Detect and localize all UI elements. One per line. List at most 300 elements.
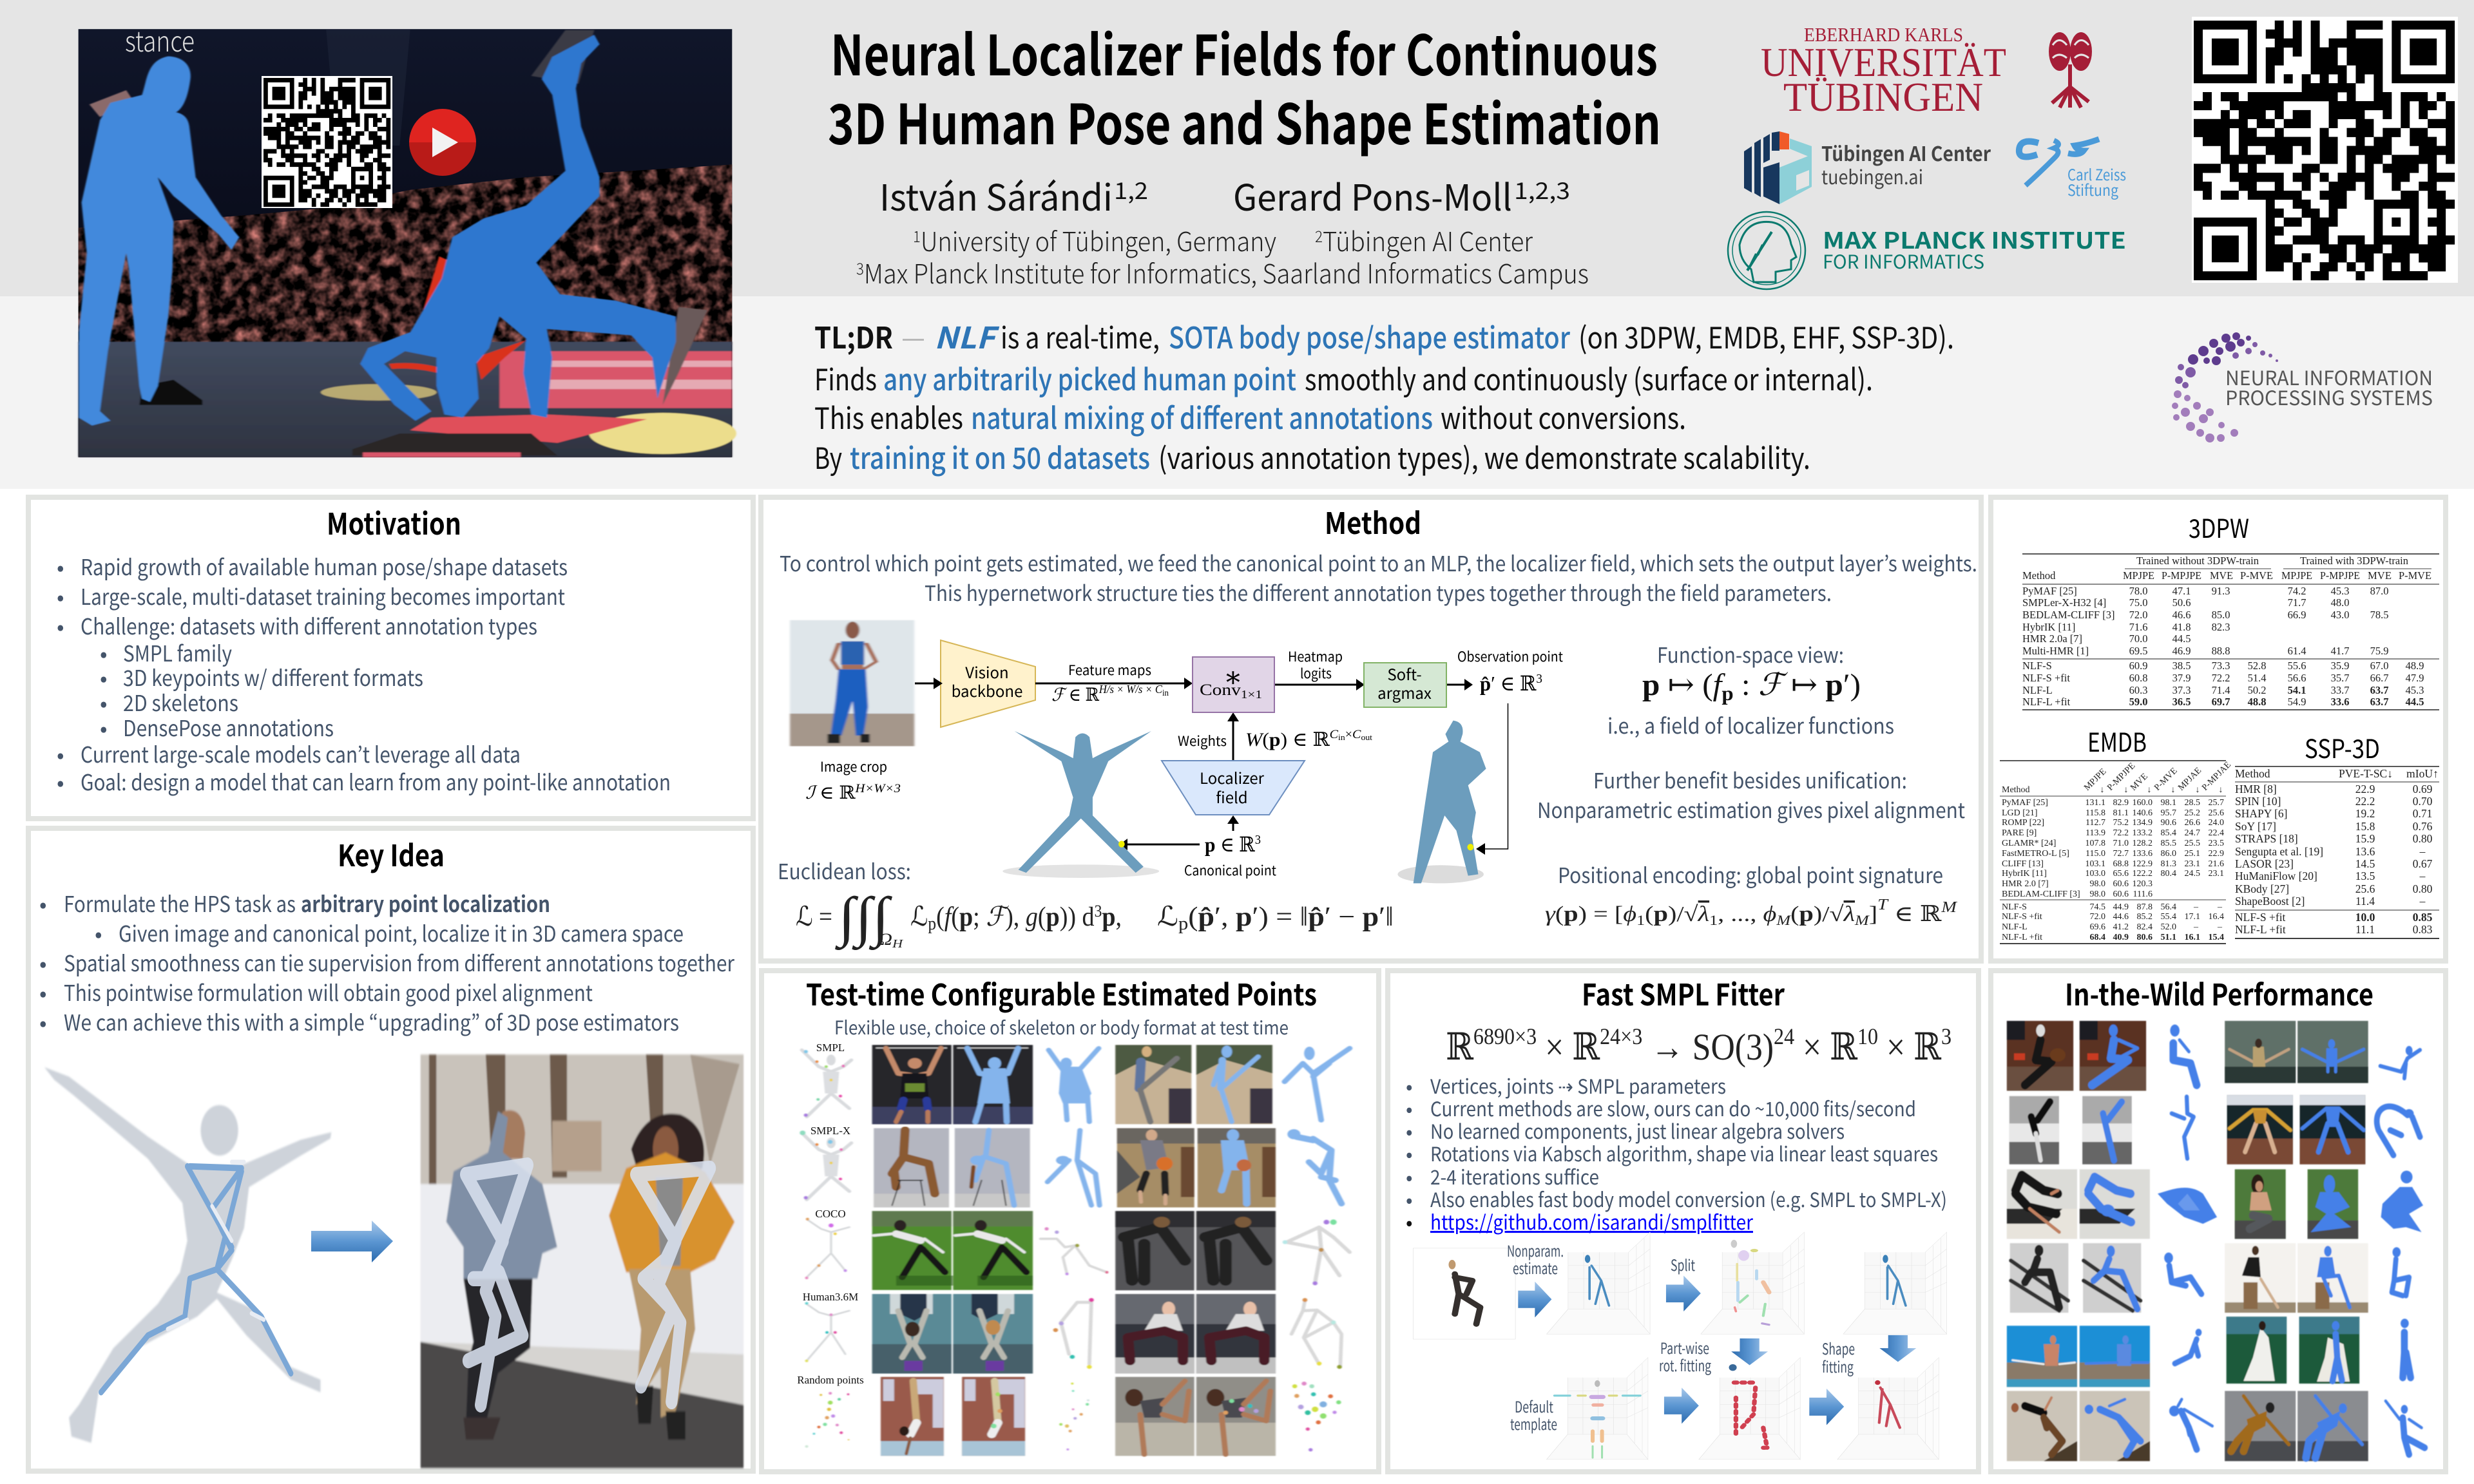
image grid: skeleton formats [800, 1045, 1350, 1456]
logo: NeurIPS: PROCESSING SYSTEMS [2225, 382, 2433, 411]
row labels [797, 1042, 864, 1386]
table: EMDB: 65.6 [2113, 869, 2129, 879]
table: EMDB: BEDLAM-CLIFF [3] [2002, 889, 2080, 899]
formula: euclidean loss: ℒ [1157, 902, 1176, 932]
table: 3DPW: P-MPJPE [2320, 569, 2360, 582]
pipeline labels: Split [1671, 1253, 1695, 1275]
table: EMDB: 133.6 [2133, 849, 2153, 859]
table: 3DPW: 37.9 [2172, 672, 2191, 684]
table: 3DPW: 88.8 [2212, 645, 2230, 657]
pipeline labels [1507, 1239, 1855, 1434]
panel: key idea [28, 828, 753, 1471]
text block: fitter bullets: • [1406, 1184, 1413, 1213]
formula: euclidean loss: ( [1188, 902, 1198, 932]
diagram: network architecture: ℐ ∈ ℝ [805, 783, 852, 803]
table: EMDB: HybrIK [11] [2002, 869, 2047, 879]
diagram: network architecture: out [1361, 732, 1372, 742]
table: EMDB: MPJPE [2082, 767, 2109, 793]
affiliations [856, 220, 1589, 291]
table: SSP-3D: HMR [8] [2235, 783, 2277, 795]
table: SSP-3D: 10.0 [2355, 911, 2375, 924]
table: EMDB: 25.6 [2209, 808, 2224, 818]
table: 3DPW: 38.5 [2172, 660, 2191, 672]
text block: fitter bullets: Current methods are slow, ours can do ~10,000 fits/second [1430, 1093, 1916, 1122]
table: EMDB: 24.7 [2184, 828, 2200, 838]
formula: euclidean loss: f(p; ℱ), g(p)) d [945, 902, 1098, 932]
heading: key idea: Key Idea [338, 833, 445, 875]
text block: motivation bullets: • [57, 765, 64, 797]
authors [879, 169, 1570, 222]
panel: motivation [28, 497, 753, 819]
heading: fast SMPL fitter: Fast SMPL Fitter [1582, 972, 1785, 1014]
block: vision backbone [941, 640, 1035, 727]
table: SSP-3D: LASOR [23] [2235, 857, 2294, 870]
formula: euclidean loss: p̂′, p′) = ‖p̂′ − p′‖ [1198, 902, 1392, 932]
diagram: network architecture: 3 [1536, 672, 1542, 686]
table: EMDB: 71.0 [2113, 839, 2129, 848]
text block: motivation bullets: 3D keypoints w/ different formats [123, 661, 423, 692]
figure: canonical and posed bodies [1002, 721, 1486, 883]
block: soft-argmax [1364, 662, 1446, 707]
table: 3DPW: NLF-L [2022, 684, 2053, 696]
logo: NeurIPS: NEURAL INFORMATION [2225, 362, 2433, 391]
table: SSP-3D: 0.80 [2413, 882, 2433, 895]
table: 3DPW: 46.9 [2172, 645, 2191, 657]
table: EMDB: 115.0 [2086, 849, 2105, 859]
table: EMDB: 24.0 [2209, 818, 2224, 828]
table: EMDB: MVE [2129, 772, 2150, 793]
formula: euclidean loss: Ω [877, 930, 890, 949]
table: EMDB: ROMP [22] [2002, 818, 2044, 828]
text block: key idea bullets: • [39, 946, 47, 978]
table: 3DPW: 66.7 [2370, 672, 2388, 684]
row 6 [2007, 1391, 2424, 1461]
row 1 [801, 1045, 1350, 1124]
table: EMDB: NLF-L [2002, 922, 2028, 932]
text block: function-space view: Further benefit besides unification: [1593, 764, 1907, 795]
table: 3DPW: Multi-HMR [1] [2022, 645, 2089, 657]
text block: motivation bullets: Rapid growth of available human pose/shape datasets [81, 550, 568, 582]
table: EMDB: 98.0 [2090, 889, 2105, 899]
formula: positional encoding: ∈ ℝ [1888, 902, 1942, 926]
formula: fitter mapping: 24 [1774, 1023, 1794, 1049]
table: EMDB: 28.5 [2184, 798, 2200, 808]
text block: fitter bullets: • [1406, 1161, 1413, 1190]
table: EMDB: NLF-S [2002, 902, 2027, 912]
logo: University of Tuebingen [1761, 23, 2092, 120]
table: 3DPW: 33.7 [2331, 684, 2349, 696]
table: 3DPW: NLF-S +fit [2022, 672, 2070, 684]
logo: University of Tuebingen: EBERHARD KARLS [1804, 23, 1963, 46]
table: SSP-3D: 15.9 [2355, 832, 2375, 845]
row 2 [800, 1128, 1341, 1208]
formula: euclidean loss: p [1178, 914, 1188, 934]
table: EMDB: ↓ [2100, 785, 2104, 795]
diagram: network architecture: Image crop [820, 757, 887, 776]
diagram: fitting pipeline [1413, 1232, 1947, 1460]
table: 3DPW: 60.9 [2129, 660, 2147, 672]
photo: joggers with skeleton overlay [421, 1054, 743, 1468]
text block: motivation bullets: • [100, 636, 108, 668]
TL;DR summary: smoothly and continuously (surface or internal). [1305, 357, 1873, 399]
table: EMDB: 133.2 [2133, 828, 2153, 838]
table: EMDB: 81.1 [2113, 808, 2129, 818]
diagram: network architecture: Feature maps [1068, 660, 1151, 680]
table: EMDB: 112.7 [2086, 818, 2105, 828]
heading: EMDB: EMDB [2087, 722, 2147, 759]
table: 3DPW: 50.2 [2248, 684, 2266, 696]
subtitle: Flexible use, choice of skeleton or body format at test time [834, 1013, 1289, 1040]
diagram: network architecture: in [1338, 732, 1345, 742]
table: 3DPW: 61.4 [2288, 645, 2306, 657]
table: SSP-3D: 0.83 [2413, 923, 2433, 936]
table: SSP-3D: – [2419, 870, 2426, 882]
table: EMDB: 75.2 [2113, 818, 2129, 828]
table: 3DPW: 66.9 [2288, 609, 2306, 621]
formula: function space: : [1734, 668, 1758, 702]
table: EMDB: 134.9 [2133, 818, 2153, 828]
block: conv [1193, 657, 1274, 712]
table: SSP-3D: 0.85 [2413, 911, 2433, 924]
table: 3DPW: 51.4 [2248, 672, 2266, 684]
diagram: network architecture: H×W×3 [854, 782, 901, 795]
panel: fast SMPL fitter [1388, 971, 1979, 1472]
text block: function-space view [778, 638, 1965, 889]
text block: fitter bullets: • [1406, 1138, 1413, 1167]
table: 3DPW: 69.7 [2212, 696, 2230, 708]
text block: motivation bullets: Goal: design a model that can learn from any point-like annotation [81, 765, 671, 797]
block: localizer field: Localizer [1200, 766, 1265, 788]
table: 3DPW: 52.8 [2248, 660, 2266, 672]
text block: key idea bullets: • [95, 917, 102, 948]
diagram: network architecture: logits [1300, 663, 1332, 683]
table: SSP-3D: – [2419, 845, 2426, 858]
text block: function-space view: Positional encoding: global point signature [1558, 859, 1943, 889]
diagram: network architecture: Heatmap [1288, 647, 1343, 666]
table: EMDB: ↓ [2196, 785, 2200, 795]
table: EMDB: Method [2002, 785, 2030, 795]
TL;DR summary: without conversions. [1441, 395, 1686, 438]
logo: Tuebingen AI Center [1744, 131, 1991, 204]
table: EMDB: 107.8 [2085, 839, 2105, 848]
logo: University of Tuebingen: UNIVERSITÄT [1761, 39, 2006, 85]
table: 3DPW: 73.3 [2212, 660, 2230, 672]
affiliations: 1 [913, 224, 921, 247]
text block: motivation bullets: 2D skeletons [123, 686, 238, 718]
TL;DR summary: training it on 50 datasets [850, 435, 1150, 478]
text block: fitter bullets: Rotations via Kabsch algorithm, shape via linear least squares [1430, 1138, 1938, 1167]
text block: fitter bullets: https://github.com/isarandi/smplfitter [1430, 1206, 1754, 1235]
table: EMDB: 72.2 [2113, 828, 2129, 838]
table: 3DPW: 91.3 [2212, 585, 2230, 597]
text block: key idea bullets: Given image and canonical point, localize it in 3D camera space [119, 917, 684, 948]
table: EMDB: 85.2 [2136, 912, 2153, 922]
table: EMDB: 24.5 [2184, 869, 2200, 879]
panel: in-the-wild performance [1991, 971, 2446, 1472]
table: EMDB: 80.6 [2136, 933, 2153, 942]
table: 3DPW: 71.6 [2129, 621, 2147, 633]
affiliations: Tübingen AI Center [1323, 220, 1533, 259]
table: 3DPW: P-MVE [2240, 569, 2273, 582]
formula: euclidean loss: ℒ [910, 902, 930, 932]
arrows: data flow [915, 683, 1508, 849]
table: 3DPW: SMPLer-X-H32 [4] [2022, 596, 2106, 609]
text block: motivation bullets: • [57, 737, 64, 769]
table: SSP-3D: mIoU↑ [2406, 767, 2439, 780]
table: 3DPW: 60.8 [2129, 672, 2147, 684]
table: 3DPW: 54.9 [2288, 696, 2306, 708]
table: EMDB: 72.7 [2113, 849, 2129, 859]
formula: fitter mapping: → SO(3) [1642, 1026, 1774, 1068]
affiliations: Max Planck Institute for Informatics, Saarland Informatics Campus [864, 252, 1589, 291]
photo: image crop [790, 620, 914, 746]
table: EMDB: 122.2 [2133, 869, 2153, 879]
TL;DR summary: natural mixing of different annotations [971, 395, 1433, 438]
table: 3DPW: 48.0 [2331, 596, 2349, 609]
text block: fitter bullets [1406, 1070, 1947, 1235]
row labels: SMPL-X [810, 1125, 850, 1137]
table: EMDB: 111.6 [2133, 889, 2153, 899]
formula: positional encoding: ϕ [1763, 902, 1776, 926]
figure: canonical body with skeleton [44, 1067, 331, 1443]
diagram: network architecture: in [1162, 689, 1169, 698]
table: 3DPW: 60.3 [2129, 684, 2147, 696]
diagram: network architecture: ℱ ∈ ℝ [1051, 685, 1102, 705]
heading: SSP-3D: SSP-3D [2305, 728, 2380, 766]
header band [0, 0, 2474, 296]
table: 3DPW: 35.9 [2331, 660, 2349, 672]
affiliations: University of Tübingen, Germany [921, 220, 1276, 259]
table: EMDB: 80.4 [2161, 869, 2176, 879]
table: SSP-3D: ShapeBoost [2] [2235, 895, 2305, 908]
table: 3DPW: 36.5 [2172, 696, 2191, 708]
authors: István Sárándi [879, 169, 1113, 222]
text block: fitter bullets: • [1406, 1206, 1413, 1235]
formula: positional encoding: ( [1645, 902, 1654, 926]
table: SSP-3D: Method [2235, 767, 2270, 780]
table: 3DPW: 35.7 [2331, 672, 2349, 684]
formula: positional encoding: M [1941, 899, 1958, 916]
table: 3DPW: 44.5 [2406, 696, 2424, 708]
formula: positional encoding: p)/√λ [1654, 902, 1707, 926]
diagram: network architecture: Canonical point [1184, 861, 1276, 880]
title: Neural Localizer Fields for Continuous [830, 11, 1658, 91]
pipeline labels: Part-wise [1660, 1336, 1709, 1358]
table: 3DPW: 45.3 [2406, 684, 2424, 696]
title: 3D Human Pose and Shape Estimation [828, 80, 1661, 160]
block: vision backbone: backbone [952, 679, 1022, 701]
text block: key idea bullets: arbitrary point localization [301, 887, 550, 918]
table: EMDB: 98.0 [2090, 879, 2105, 889]
table: EMDB: 60.6 [2113, 879, 2129, 889]
table: 3DPW: 47.1 [2172, 585, 2191, 597]
table: 3DPW: 41.7 [2331, 645, 2349, 657]
table: SSP-3D: HuManiFlow [20] [2235, 870, 2317, 882]
authors: 1,2,3 [1514, 173, 1570, 206]
table: 3DPW: 43.0 [2331, 609, 2349, 621]
affiliations: 2 [1315, 224, 1323, 247]
table: EMDB: – [2193, 902, 2199, 912]
logo: NeurIPS [2172, 332, 2433, 442]
diagram: network architecture: Observation point [1457, 647, 1563, 666]
text block: motivation bullets: • [57, 580, 64, 611]
pipeline labels: Shape [1822, 1337, 1855, 1359]
heading: 3DPW: 3DPW [2189, 508, 2249, 546]
block: soft-argmax: Soft- [1387, 662, 1422, 685]
table: 3DPW: 63.7 [2370, 684, 2388, 696]
table: EMDB: 23.1 [2184, 859, 2200, 869]
text block: fitter bullets: • [1406, 1116, 1413, 1145]
diagram: network architecture: 3 [1255, 833, 1261, 847]
table: EMDB: – [2193, 922, 2199, 932]
table: EMDB: 26.6 [2184, 818, 2200, 828]
formula: positional encoding: , ..., [1718, 902, 1763, 926]
table: EMDB: PARE [9] [2002, 828, 2037, 838]
logo: Carl Zeiss Stiftung: Stiftung [2067, 178, 2118, 200]
table: EMDB: 87.8 [2136, 902, 2153, 912]
text block: key idea bullets: Spatial smoothness can tie supervision from different annotations together [64, 946, 735, 978]
table: EMDB: HMR 2.0 [7] [2002, 879, 2049, 889]
table: 3DPW: MVE [2210, 569, 2233, 582]
text block: fitter bullets: 2-4 iterations suffice [1430, 1161, 1599, 1190]
table: 3DPW [2022, 554, 2439, 710]
table: 3DPW: HMR 2.0a [7] [2022, 633, 2082, 645]
text block: motivation bullets [57, 550, 671, 797]
table: 3DPW: 72.0 [2129, 609, 2147, 621]
table: EMDB: 68.8 [2113, 859, 2129, 869]
table: 3DPW: NLF-L +fit [2022, 696, 2071, 708]
table: 3DPW: 44.5 [2172, 633, 2191, 645]
formula: function space: ℱ ↦ p′) [1758, 668, 1860, 702]
text block: key idea bullets: • [39, 1005, 47, 1037]
pipeline labels: rot. fitting [1659, 1353, 1711, 1376]
text block: motivation bullets: SMPL family [123, 636, 232, 668]
table: EMDB: 56.4 [2161, 902, 2176, 912]
heading: test-time: Test-time Configurable Estimated Points [806, 972, 1317, 1014]
table: SSP-3D: 0.69 [2413, 783, 2433, 795]
image grid: wild results [2007, 1021, 2424, 1461]
pipeline labels: template [1510, 1412, 1557, 1434]
formula: fitter mapping: 3 [1941, 1023, 1951, 1049]
table: EMDB: 17.1 [2184, 912, 2200, 922]
table: EMDB: MPJAE [2176, 766, 2203, 793]
text block: key idea bullets: • [39, 887, 47, 918]
pipeline labels: fitting [1822, 1355, 1854, 1377]
table: EMDB: LGD [21] [2002, 808, 2038, 818]
text block: function-space view: Function-space view: [1657, 638, 1844, 669]
table: 3DPW: 74.2 [2288, 585, 2306, 597]
table: 3DPW: 33.6 [2331, 696, 2349, 708]
table: 3DPW: NLF-S [2022, 660, 2052, 672]
table: EMDB: 113.9 [2086, 828, 2105, 838]
table: SSP-3D: 15.8 [2355, 820, 2375, 833]
row labels: Human3.6M [803, 1291, 858, 1303]
diagram: network architecture: C [1352, 728, 1361, 741]
table: EMDB: 98.1 [2161, 798, 2176, 808]
row 4 [805, 1294, 1342, 1374]
table: EMDB: 16.4 [2209, 912, 2224, 922]
table: SSP-3D: SoY [17] [2235, 820, 2276, 833]
photo: input [1413, 1248, 1515, 1339]
table: EMDB: GLAMR* [24] [2002, 839, 2056, 848]
diagram: network architecture: Weights [1178, 731, 1227, 750]
table: 3DPW: PyMAF [25] [2022, 585, 2077, 597]
table: 3DPW: MVE [2368, 569, 2392, 582]
table: EMDB: 128.2 [2133, 839, 2153, 848]
logo: Carl Zeiss Stiftung: Carl Zeiss [2067, 162, 2126, 185]
table: 3DPW: 78.5 [2370, 609, 2388, 621]
formula: euclidean loss [796, 886, 1394, 951]
diagram: network architecture: p ∈ ℝ [1205, 833, 1258, 856]
table: EMDB: 69.6 [2090, 922, 2105, 932]
TL;DR summary: (various annotation types), we demonstrate scalability. [1158, 435, 1810, 478]
formula: function space: p ↦ (f [1642, 668, 1721, 702]
table: EMDB: NLF-L +fit [2002, 933, 2042, 942]
table: 3DPW: 63.7 [2370, 696, 2388, 708]
TL;DR summary: By [814, 435, 842, 478]
table: 3DPW: HybrIK [11] [2022, 621, 2075, 633]
stance logo: stance [125, 19, 195, 60]
text block: motivation bullets: Challenge: datasets with different annotation types [81, 609, 537, 641]
formula: function space: p [1721, 681, 1734, 705]
table: 3DPW: 72.2 [2212, 672, 2230, 684]
authors: Gerard Pons-Moll [1233, 169, 1512, 222]
text block: function-space view: Euclidean loss: [778, 855, 911, 886]
formula: positional encoding: 1 [1709, 912, 1718, 928]
table: 3DPW: 75.9 [2370, 645, 2388, 657]
formula: euclidean loss: 3 [1095, 902, 1102, 920]
table: SSP-3D: 0.70 [2413, 795, 2433, 808]
table: SSP-3D: NLF-L +fit [2235, 923, 2286, 936]
table: EMDB: 115.8 [2086, 808, 2105, 818]
table: EMDB: – [2217, 922, 2223, 932]
formula: positional encoding: ] [1869, 902, 1877, 926]
table: 3DPW: 75.0 [2129, 596, 2147, 609]
table: EMDB: 90.6 [2161, 818, 2176, 828]
block: localizer field: field [1216, 785, 1248, 808]
table: EMDB: 120.3 [2133, 879, 2153, 889]
tldr band [0, 296, 2474, 489]
table: EMDB: 16.1 [2184, 933, 2200, 942]
logo: Max Planck Institute: FOR INFORMATICS [1823, 247, 1984, 274]
table: EMDB: 23.1 [2209, 869, 2224, 879]
formula: euclidean loss: H [892, 937, 903, 950]
diagram: network architecture: C [1330, 728, 1338, 741]
row 5 [805, 1377, 1341, 1456]
TL;DR summary: TL;DR [814, 315, 893, 357]
row labels: SMPL [816, 1042, 845, 1054]
table: EMDB: 23.5 [2209, 839, 2224, 848]
table: SSP-3D: Sengupta et al. [19] [2235, 845, 2323, 858]
table: 3DPW: 71.4 [2212, 684, 2230, 696]
text block: motivation bullets: DensePose annotations [123, 711, 334, 743]
table: 3DPW: 48.9 [2406, 660, 2424, 672]
table: EMDB: 68.4 [2090, 933, 2105, 942]
heading: in-the-wild: In-the-Wild Performance [2065, 972, 2373, 1014]
TL;DR summary: NLF [934, 315, 1000, 357]
table: SSP-3D: 25.6 [2355, 882, 2375, 895]
text block: fitter bullets: Vertices, joints ⇢ SMPL parameters [1430, 1070, 1726, 1099]
table: EMDB: 60.6 [2113, 889, 2129, 899]
text block: motivation bullets: • [57, 609, 64, 641]
table: 3DPW: 50.6 [2172, 596, 2191, 609]
table: EMDB: 25.5 [2184, 839, 2200, 848]
table: 3DPW: 41.8 [2172, 621, 2191, 633]
table: SSP-3D: 13.5 [2355, 870, 2375, 882]
text block: motivation bullets: • [100, 661, 108, 692]
text block: key idea bullets: This pointwise formulation will obtain good pixel alignment [64, 976, 593, 1007]
table: EMDB: P-MPJAE [2200, 760, 2233, 793]
